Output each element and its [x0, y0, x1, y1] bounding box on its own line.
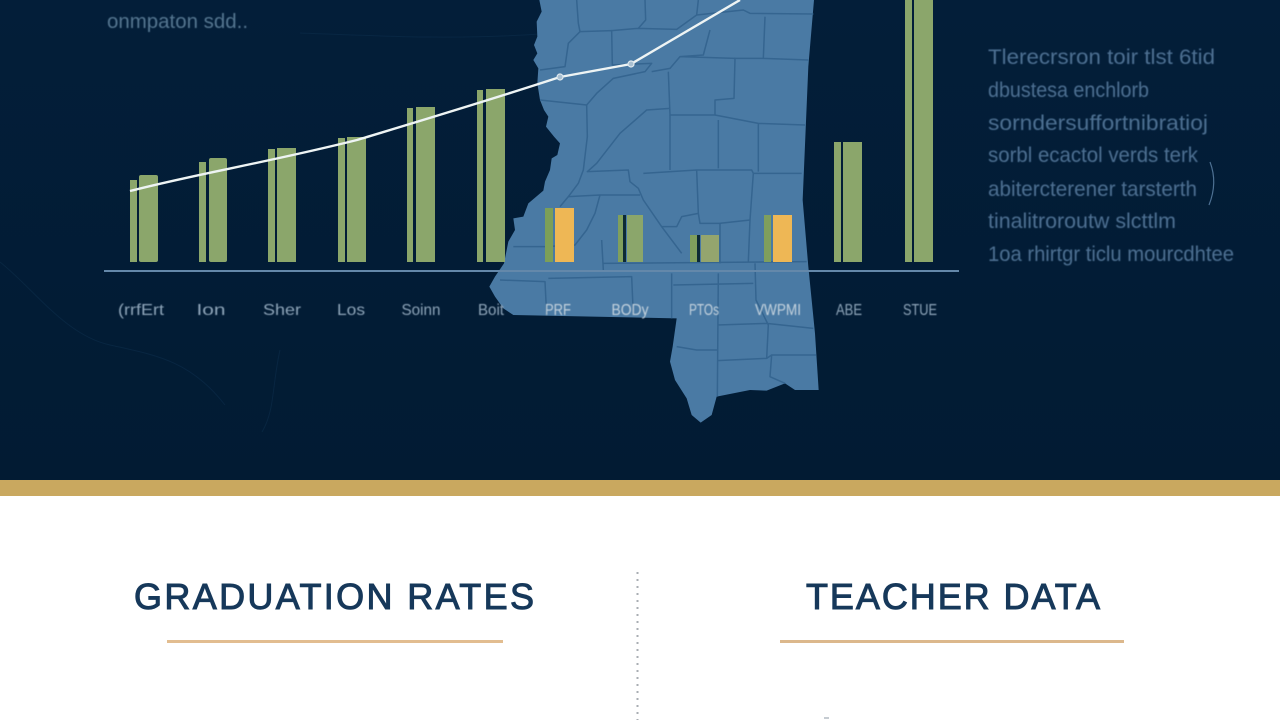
text block: right column: sorbl ecactol verds terk [988, 144, 1198, 167]
axis labels: (rrfErt [118, 302, 165, 319]
axis labels: STUE [903, 302, 937, 319]
bar group 9 [690, 235, 719, 262]
bar group 12 [905, 0, 933, 262]
axis line [104, 270, 959, 272]
axis labels: Ion [196, 302, 226, 319]
text block: right column: 1oa rhirtgr ticlu mourcdhtee [988, 243, 1234, 266]
heading: graduation rates: GRADUATION RATES [134, 576, 534, 617]
bar group 2 [199, 158, 227, 262]
bar group 4 [338, 137, 366, 262]
vertical dotted divider [636, 572, 638, 720]
bar group 1 [130, 175, 158, 262]
panel: white lower section [0, 496, 1280, 720]
bar group 5 [407, 107, 435, 262]
axis labels: BODy [612, 302, 648, 319]
axis labels [118, 302, 937, 319]
bar group 6 [477, 89, 505, 262]
trend line with markers [130, 0, 740, 191]
axis labels: Boit [478, 302, 505, 319]
axis labels: Soinn [402, 302, 440, 319]
axis labels: Los [337, 302, 365, 319]
map outline [489, 0, 819, 423]
bar group 10 [764, 215, 792, 262]
text block: right column: dbustesa enchlorb [988, 79, 1149, 102]
intro text fragment: onmpaton sdd.. [107, 11, 248, 33]
marker [557, 74, 563, 80]
bar group 8 [618, 215, 643, 262]
axis labels: PRF [545, 302, 571, 319]
text block: right column: tinalitroroutw slcttlm [988, 210, 1176, 233]
axis labels: Sher [263, 302, 302, 319]
underline: teacher data [780, 640, 1124, 643]
marker [628, 61, 634, 67]
bar group 3 [268, 148, 296, 262]
bar group 11 [834, 142, 862, 262]
faint background contours [0, 33, 540, 432]
text block: right column: sorndersuffortnibratioj [988, 112, 1208, 135]
axis labels: ABE [836, 302, 862, 319]
map: state silhouette with county lines [489, 0, 819, 423]
text block: right column [988, 46, 1234, 266]
bar chart [130, 0, 933, 262]
bracket mark [1209, 162, 1214, 205]
heading: teacher data: TEACHER DATA [806, 576, 1100, 617]
underline: graduation rates [167, 640, 503, 643]
text block: right column: Tlerecrsron toir tlst 6tid [988, 46, 1215, 69]
clipped mark at lower edge [824, 717, 829, 719]
text block: right column: abitercterener tarsterth [988, 178, 1197, 201]
panel: dark navy upper section [0, 0, 1280, 480]
gold divider band [0, 480, 1280, 496]
county lines [500, 0, 816, 397]
bar group 7 [545, 208, 574, 262]
axis labels: PTOs [689, 302, 719, 319]
axis labels: VWPMI [755, 302, 801, 319]
